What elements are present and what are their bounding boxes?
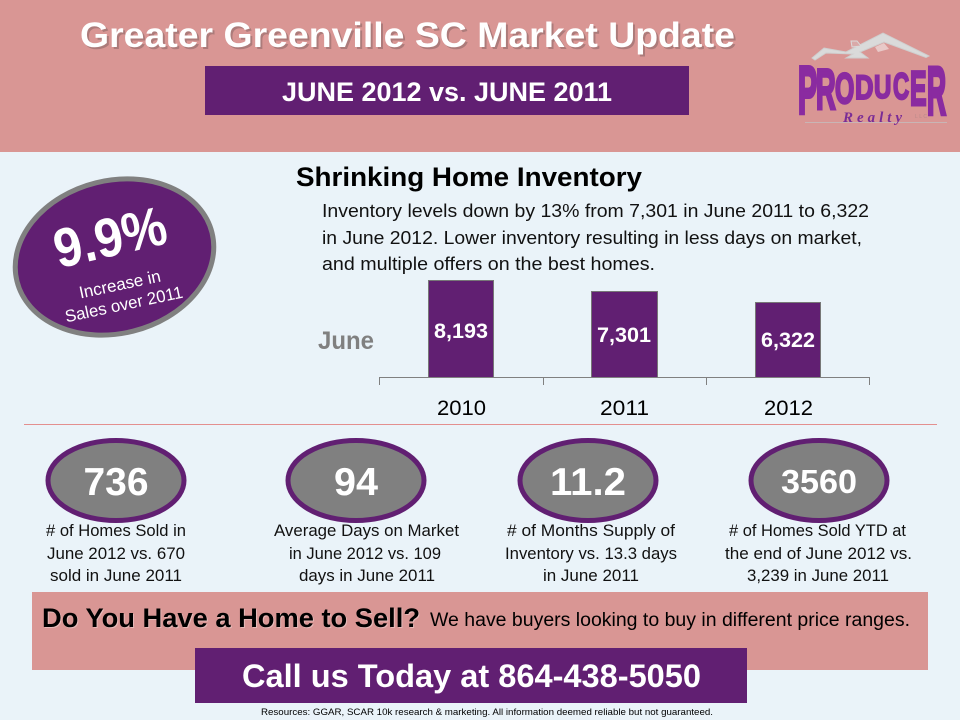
subtitle bar: [205, 66, 689, 115]
stat: months supply: in June 2011: [543, 566, 639, 585]
bar 2011: [592, 292, 658, 378]
logo wordmark: [798, 52, 946, 129]
bar 2010: [428, 280, 494, 378]
stat: homes sold YTD: # of Homes Sold YTD at: [729, 521, 906, 540]
icon: roof: [812, 33, 929, 60]
stat: homes sold YTD: the end of June 2012 vs.: [725, 544, 912, 563]
stat: homes sold: 736: [84, 461, 148, 504]
year labels: 2012: [764, 397, 813, 420]
inventory description text: [322, 201, 869, 274]
stat: months supply: 11.2: [550, 461, 626, 504]
bar 2012: 6,322: [761, 329, 815, 352]
title: Greater Greenville SC Market Update: [82, 18, 737, 57]
bar chart: June inventory: [318, 280, 870, 420]
badge: 9.9% sales increase: 9.9%: [47, 194, 173, 280]
logo tagline: Realty: [842, 110, 902, 126]
stat: homes sold: [46, 440, 186, 585]
stat: homes sold YTD: 3,239 in June 2011: [747, 566, 889, 585]
logo wordmark: U: [874, 69, 891, 105]
footer sources: Resources: GGAR, SCAR 10k research & marketing. All information deemed reliable but not guaranteed.: [261, 707, 713, 718]
badge: 9.9% sales increase: Sales over 2011: [63, 283, 185, 326]
heading: Shrinking Home Inventory: Shrinking Home Inventory: [296, 162, 642, 192]
badge: 9.9% sales increase: [0, 158, 231, 356]
CTA headline: Do You Have a Home to Sell?: [43, 604, 421, 634]
logo wordmark: P: [798, 52, 817, 127]
stat: homes sold: sold in June 2011: [50, 566, 182, 585]
logo wordmark: O: [835, 66, 854, 113]
logo tagline: LLC: [915, 114, 927, 120]
stat: days on market: Average Days on Market: [274, 521, 459, 540]
CTA headline: Do You Have a Home to Sell?: [42, 603, 420, 633]
logo tagline: [805, 110, 947, 126]
logo wordmark: E: [910, 62, 927, 116]
stat: months supply: [505, 440, 677, 585]
stat: homes sold YTD: 3560: [781, 463, 857, 500]
logo wordmark: C: [893, 66, 909, 107]
inventory description text: Inventory levels down by 13% from 7,301 in June 2011 to 6,322: [322, 201, 869, 221]
logo wordmark: R: [816, 59, 836, 122]
stat: homes sold: # of Homes Sold in: [46, 521, 186, 540]
phone call bar: Call us Today at 864-438-5050: [242, 658, 701, 694]
bar 2011: 7,301: [597, 324, 651, 347]
stat: days on market: 94: [334, 461, 378, 504]
stat: months supply: # of Months Supply of: [507, 521, 675, 540]
bar 2012: [756, 302, 820, 378]
header banner: [0, 0, 960, 152]
year labels: 2011: [600, 397, 649, 420]
year labels: [437, 397, 813, 420]
call-to-action panel: [32, 592, 928, 670]
stat: months supply: Inventory vs. 13.3 days: [505, 544, 677, 563]
stat: days on market: [274, 440, 459, 585]
stat: days on market: days in June 2011: [299, 566, 435, 585]
axis label: June: June: [318, 327, 374, 355]
stat: homes sold YTD: [725, 440, 912, 585]
subtitle bar: JUNE 2012 vs. JUNE 2011: [282, 77, 612, 107]
badge: 9.9% sales increase: Increase in: [77, 267, 162, 302]
stat: homes sold: June 2012 vs. 670: [47, 544, 185, 563]
CTA text: We have buyers looking to buy in different price ranges.: [430, 610, 910, 631]
inventory description text: and multiple offers on the best homes.: [322, 254, 655, 274]
logo wordmark: R: [927, 52, 946, 129]
inventory description text: in June 2012. Lower inventory resulting in less days on market,: [322, 228, 862, 248]
logo wordmark: D: [855, 70, 873, 107]
year labels: 2010: [437, 397, 486, 420]
logo: Producer Realty: [798, 33, 947, 129]
bar 2010: 8,193: [434, 320, 488, 343]
phone call bar: [195, 648, 747, 703]
title: Greater Greenville SC Market Update: [80, 16, 735, 55]
stat: days on market: in June 2012 vs. 109: [289, 544, 441, 563]
